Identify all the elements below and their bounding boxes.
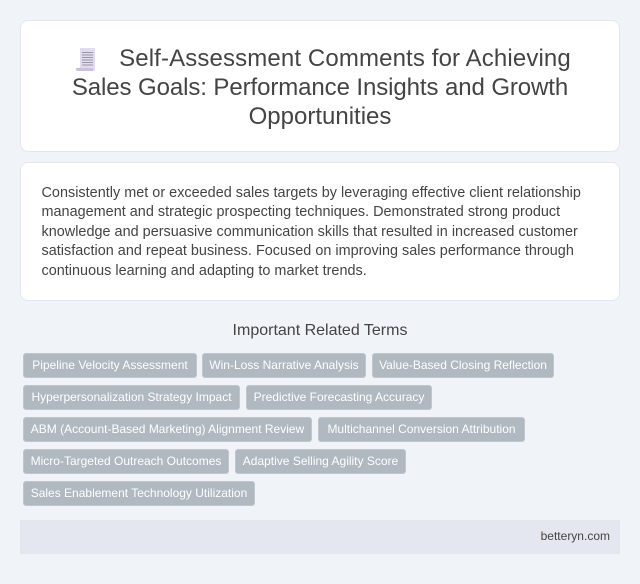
tag: Predictive Forecasting Accuracy xyxy=(254,390,424,404)
title: Opportunities xyxy=(249,103,391,130)
tag: Multichannel Conversion Attribution xyxy=(327,422,516,436)
text block: summary paragraph: satisfaction and repeat business. Focused on improving sales performance through xyxy=(42,243,574,259)
panel: title card xyxy=(20,20,620,152)
tag xyxy=(202,353,366,378)
title: Self-Assessment Comments for Achieving xyxy=(119,45,571,72)
text block: summary paragraph xyxy=(42,185,581,279)
title xyxy=(72,45,571,130)
tag: ABM (Account-Based Marketing) Alignment Review xyxy=(31,422,304,436)
tag xyxy=(23,353,197,378)
tag: Adaptive Selling Agility Score xyxy=(243,454,398,468)
panel: summary card xyxy=(20,162,620,301)
tag xyxy=(23,417,312,442)
tag xyxy=(246,385,432,410)
footer text: site name: betteryn.com xyxy=(541,529,610,543)
icon: receipt document xyxy=(76,48,95,71)
text block: summary paragraph: knowledge and persuasive communication skills that resulted in increased customer xyxy=(42,224,578,240)
tag: Sales Enablement Technology Utilization xyxy=(31,486,247,500)
tag xyxy=(23,385,240,410)
tag: Value-Based Closing Reflection xyxy=(379,358,547,372)
tag xyxy=(372,353,554,378)
heading: important related terms: Important Related Terms xyxy=(233,322,407,339)
text block: summary paragraph: Consistently met or exceeded sales targets by leveraging effective client relationship xyxy=(42,185,581,201)
panel: term tags xyxy=(23,353,554,506)
tag xyxy=(318,417,525,442)
tag: Micro-Targeted Outreach Outcomes xyxy=(31,454,221,468)
tag: Win-Loss Narrative Analysis xyxy=(209,358,359,372)
tag xyxy=(23,449,229,474)
title: Sales Goals: Performance Insights and Growth xyxy=(72,74,568,101)
text block: summary paragraph: management and strategic prospecting techniques. Demonstrated strong product xyxy=(42,204,560,220)
tag: Pipeline Velocity Assessment xyxy=(32,358,188,372)
tag: Hyperpersonalization Strategy Impact xyxy=(31,390,232,404)
text block: summary paragraph: continuous learning and adapting to market trends. xyxy=(42,263,367,279)
footer bar xyxy=(20,520,620,554)
tag xyxy=(235,449,406,474)
tag xyxy=(23,481,255,506)
